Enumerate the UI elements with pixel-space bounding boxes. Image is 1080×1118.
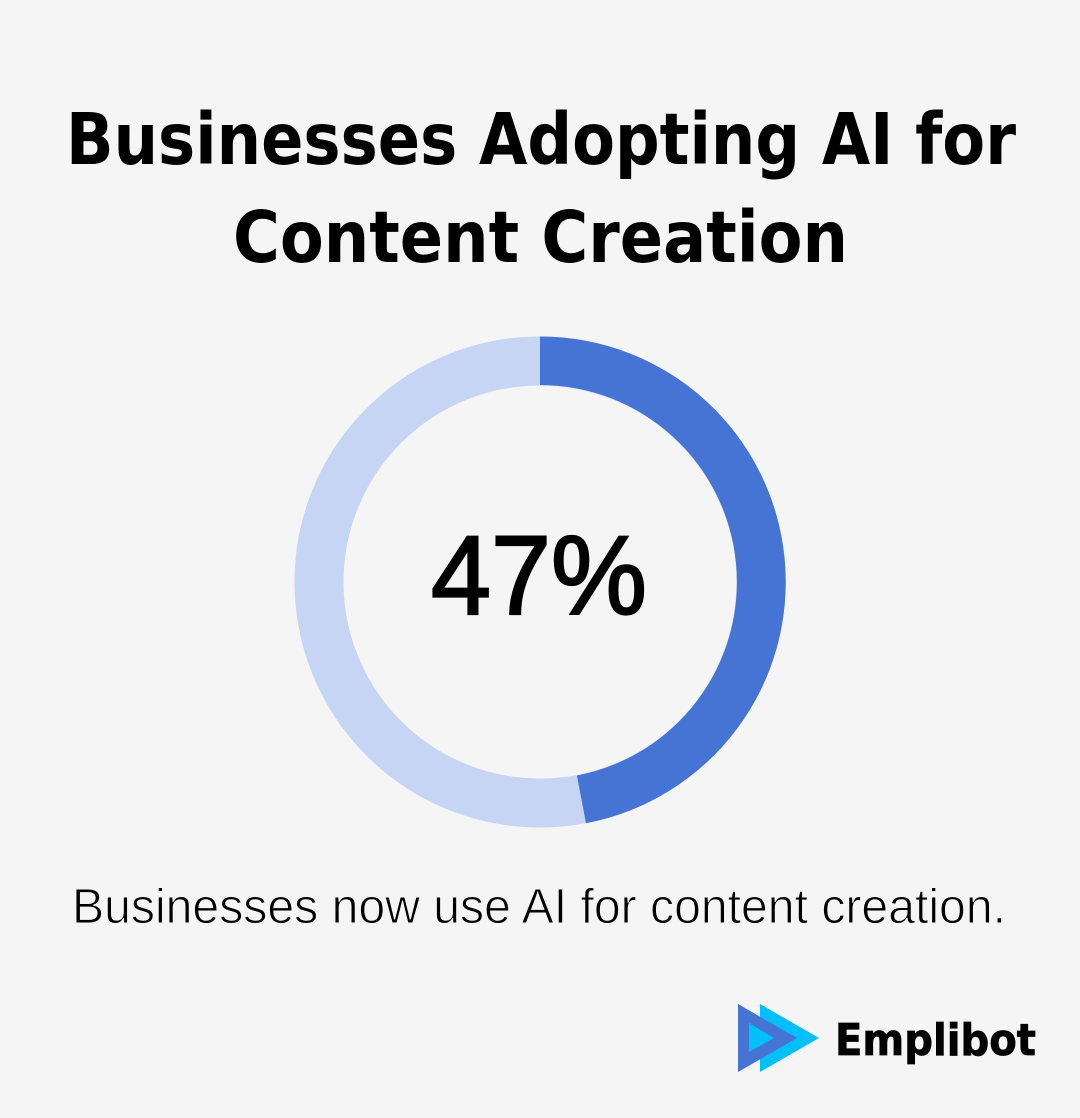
- icon: play triangles: [738, 1004, 819, 1072]
- percentage value: 47%: [431, 513, 647, 638]
- title: Content Creation: [233, 196, 848, 279]
- donut chart: 47%: [319, 336, 786, 823]
- donut track: [319, 361, 761, 803]
- logo: Emplibot: [738, 1004, 1036, 1072]
- donut value arc: [540, 336, 786, 823]
- logo wordmark: Emplibot: [835, 1015, 1036, 1066]
- title: [66, 98, 1016, 279]
- caption: Businesses now use AI for content creation.: [72, 880, 1006, 934]
